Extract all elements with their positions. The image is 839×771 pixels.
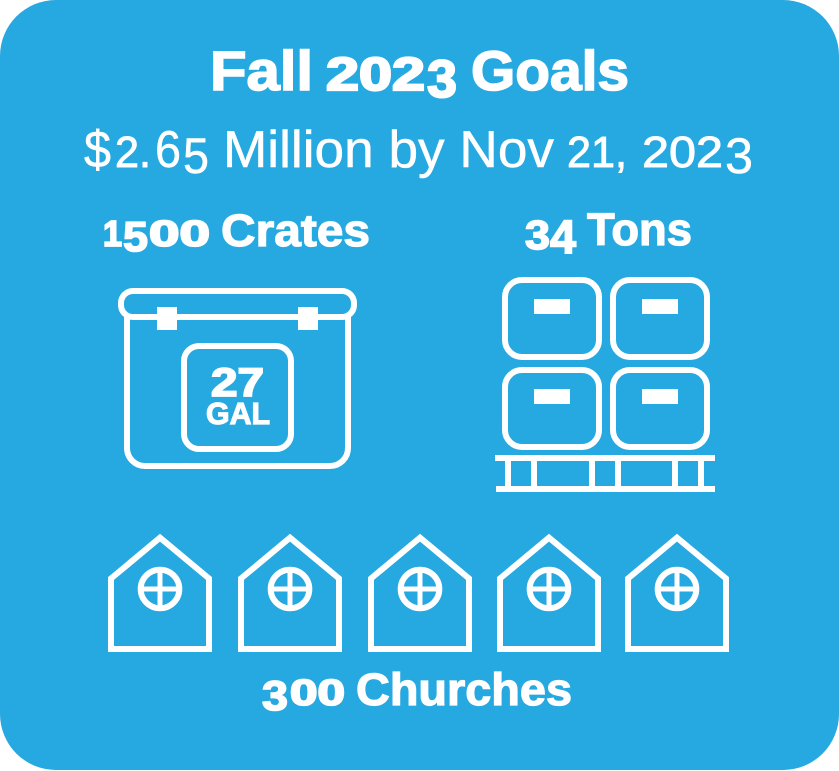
heading: churches: 00	[290, 672, 345, 713]
title: Fall	[210, 39, 313, 102]
icon: church 1	[111, 538, 209, 649]
cooler label	[184, 346, 291, 449]
cooler latch right	[298, 307, 318, 330]
title: 202	[326, 48, 425, 100]
subtitle: $	[84, 121, 111, 179]
icon: cooler crate	[121, 291, 354, 466]
pallet	[495, 455, 715, 492]
icon: church 5	[628, 538, 726, 649]
heading: churches: Churches	[356, 664, 572, 715]
subtitle: 5	[183, 128, 209, 184]
title: 3	[427, 50, 457, 109]
box bottom right	[613, 370, 707, 447]
heading: crates: 5	[123, 213, 148, 260]
heading: crates: Crates	[221, 205, 370, 256]
subtitle: 202	[642, 128, 723, 177]
icon: church 3	[371, 538, 469, 649]
heading: crates: 1	[103, 213, 122, 254]
icon: church 2	[241, 538, 339, 649]
cooler lid	[121, 291, 354, 317]
box labels	[534, 299, 678, 404]
heading: crates: 00	[149, 213, 210, 254]
cooler body	[127, 317, 348, 466]
heading: tons: 3	[525, 212, 550, 258]
box bottom left	[505, 370, 599, 447]
subtitle: 6	[155, 121, 181, 179]
label: GAL: GAL	[206, 396, 270, 431]
heading: tons: 4	[550, 210, 576, 263]
heading: tons: Tons	[587, 204, 692, 255]
box top right	[613, 280, 707, 357]
icon: pallet of boxes	[495, 280, 715, 492]
label: 27: 27	[211, 361, 264, 405]
subtitle: 3	[725, 128, 753, 184]
cooler latch left	[157, 307, 177, 330]
heading: churches: 3	[262, 672, 288, 719]
title: Goals	[471, 39, 629, 102]
subtitle: 2.	[115, 128, 151, 177]
subtitle: 21,	[567, 128, 627, 177]
icon: church 4	[500, 538, 598, 649]
subtitle: Million by Nov	[223, 121, 554, 179]
box top left	[505, 280, 599, 357]
